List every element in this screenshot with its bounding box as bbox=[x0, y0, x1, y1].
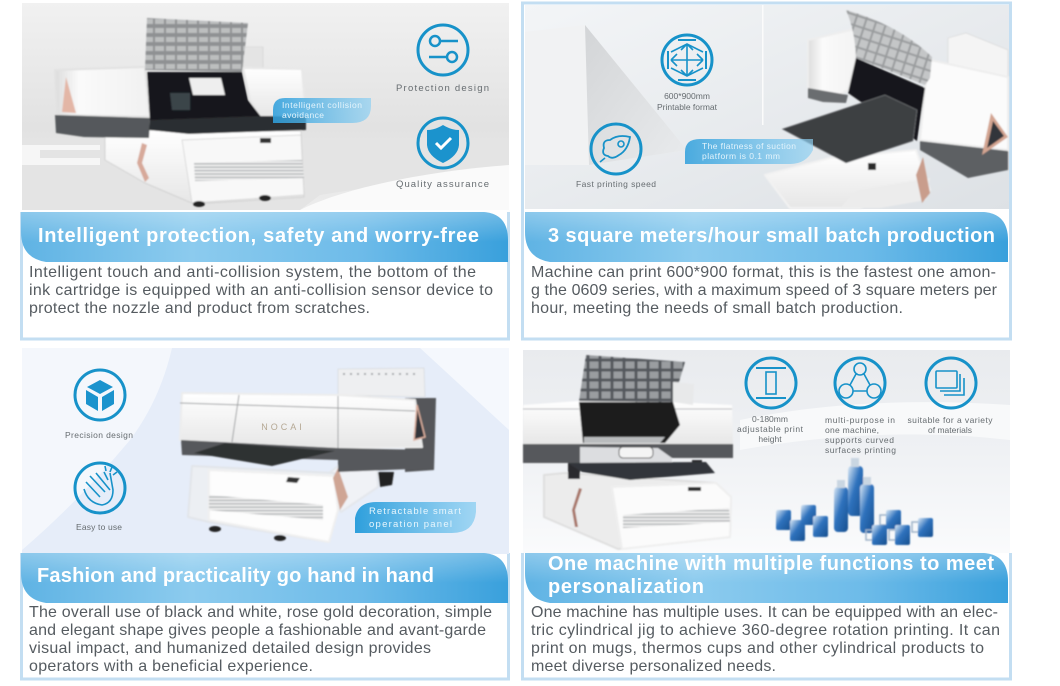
label: adjustable print height: adjustable print bbox=[737, 424, 804, 434]
label: adjustable print height bbox=[737, 414, 804, 444]
icon: easy to use clapping hands bbox=[75, 463, 125, 513]
body text: small batch production: g the 0609 series, with a maximum speed of 3 square meters per bbox=[531, 282, 998, 299]
icon: variety of materials bbox=[926, 358, 976, 408]
photo background bbox=[525, 5, 1009, 209]
label: printable format bbox=[657, 91, 718, 112]
panel frame bbox=[22, 212, 508, 339]
printer illustration bbox=[55, 18, 306, 207]
panel: fashion and practicality bbox=[21, 348, 509, 679]
panel: intelligent protection bbox=[21, 3, 509, 339]
panel frame bbox=[522, 553, 1010, 679]
label: precision design: Precision design bbox=[65, 430, 133, 440]
label: multi-purpose: one machine, bbox=[825, 425, 879, 435]
callout: intelligent collision avoidance: avoidance bbox=[282, 110, 324, 120]
body text: small batch production bbox=[531, 264, 998, 317]
banner: small batch production: 3 square meters/hour small batch production bbox=[548, 225, 995, 247]
callout: retractable smart operation panel bbox=[355, 502, 476, 533]
icon: adjustable print height bbox=[746, 358, 796, 408]
label: quality assurance: Quality assurance bbox=[396, 179, 489, 190]
body text: one machine multiple functions: tric cylindrical jig to achieve 360-degree rotation printing. It can bbox=[531, 622, 1000, 639]
label: adjustable print height: 0-180mm bbox=[752, 414, 788, 424]
panel frame bbox=[522, 3, 1010, 339]
callout: flatness of suction platform: The flatness of suction bbox=[702, 141, 796, 151]
body text: fashion and practicality: operators with a beneficial experience. bbox=[29, 658, 313, 675]
banner: intelligent protection bbox=[21, 212, 508, 262]
label: printable format: 600*900mm bbox=[664, 91, 710, 101]
body text: small batch production: hour, meeting the needs of small batch production. bbox=[531, 300, 903, 317]
photo background bbox=[523, 350, 1010, 553]
icon: quality assurance shield bbox=[418, 118, 468, 168]
label: protection design: Protection design bbox=[396, 83, 489, 94]
body text: intelligent protection: Intelligent touch and anti-collision system, the bottom of the bbox=[29, 264, 476, 281]
label: easy to use: Easy to use bbox=[76, 522, 122, 532]
label: multi-purpose: surfaces printing bbox=[825, 445, 896, 455]
panel: one machine multiple functions bbox=[522, 350, 1010, 679]
label: multi-purpose bbox=[825, 415, 896, 455]
banner: intelligent protection: Intelligent protection, safety and worry-free bbox=[38, 225, 479, 247]
icon: printable format bbox=[662, 35, 712, 85]
label: adjustable print height: height bbox=[758, 434, 782, 444]
banner: fashion and practicality bbox=[21, 553, 508, 603]
icon: protection design bbox=[418, 25, 468, 75]
callout: flatness of suction platform bbox=[685, 139, 813, 164]
body text: fashion and practicality: visual impact, and humanized detailed design provides bbox=[29, 640, 431, 657]
label: variety of materials: of materials bbox=[928, 425, 972, 435]
callout: flatness of suction platform: platform is 0.1 mm bbox=[702, 151, 780, 161]
label: multi-purpose: multi-purpose in bbox=[825, 415, 895, 425]
banner: small batch production bbox=[525, 212, 1008, 262]
panel frame bbox=[22, 553, 508, 679]
printer illustration bbox=[180, 368, 436, 542]
banner: one machine multiple functions: One machine with multiple functions to meet bbox=[548, 553, 994, 575]
label: fast printing speed: Fast printing speed bbox=[576, 179, 656, 189]
icon: fast printing speed rocket bbox=[591, 124, 641, 174]
body text: intelligent protection: ink cartridge is equipped with an anti-collision sensor device to bbox=[29, 282, 493, 299]
body text: one machine multiple functions: meet diverse personalized needs. bbox=[531, 658, 776, 675]
callout: retractable smart operation panel: operation panel bbox=[369, 519, 452, 530]
label: printable format: Printable format bbox=[657, 102, 718, 112]
body text: one machine multiple functions bbox=[531, 604, 1000, 675]
photo background bbox=[22, 348, 509, 554]
brand mark: NOCAI: NOCAI bbox=[261, 422, 305, 432]
label: variety of materials: suitable for a variety bbox=[908, 415, 993, 425]
banner: one machine multiple functions bbox=[525, 553, 1008, 603]
body text: fashion and practicality bbox=[29, 604, 492, 675]
callout: intelligent collision avoidance bbox=[273, 98, 371, 123]
body text: fashion and practicality: and elegant shape gives people a fashionable and avant-garde bbox=[29, 622, 486, 639]
product samples: printed bottles and mugs bbox=[776, 458, 933, 545]
photo background bbox=[22, 3, 509, 210]
banner: one machine multiple functions: personalization bbox=[548, 576, 704, 598]
callout: retractable smart operation panel: Retractable smart bbox=[369, 506, 461, 517]
icon: multi-purpose molecule bbox=[835, 358, 885, 408]
printer illustration bbox=[765, 10, 1008, 208]
body text: fashion and practicality: The overall use of black and white, rose gold decoration, simple bbox=[29, 604, 492, 621]
panel: small batch production bbox=[522, 3, 1010, 339]
label: multi-purpose: supports curved bbox=[825, 435, 894, 445]
banner: fashion and practicality: Fashion and practicality go hand in hand bbox=[37, 565, 434, 587]
printer illustration bbox=[523, 355, 733, 549]
body text: intelligent protection: protect the nozzle and product from scratches. bbox=[29, 300, 370, 317]
body text: intelligent protection bbox=[29, 264, 493, 317]
callout: intelligent collision avoidance: Intelligent collision bbox=[282, 100, 362, 110]
icon: precision design cube bbox=[75, 370, 125, 420]
label: variety of materials bbox=[908, 415, 993, 435]
body text: one machine multiple functions: One machine has multiple uses. It can be equipped with an elec- bbox=[531, 604, 998, 621]
body text: one machine multiple functions: print on mugs, thermos cups and other cylindrical products to bbox=[531, 640, 984, 657]
body text: small batch production: Machine can print 600*900 format, this is the fastest one amon- bbox=[531, 264, 996, 281]
